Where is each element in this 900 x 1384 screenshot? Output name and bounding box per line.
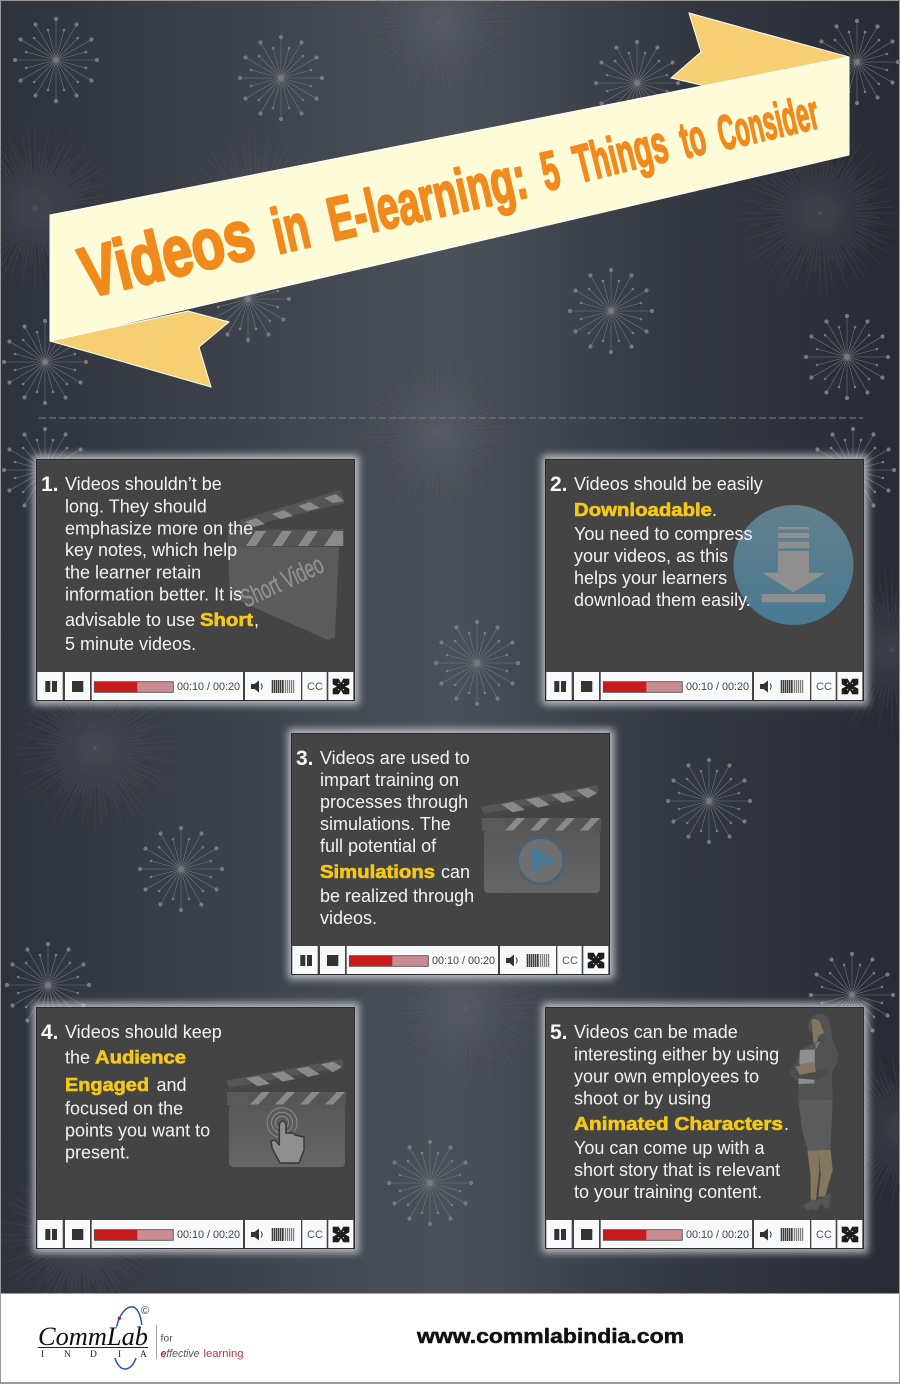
text block: . bbox=[784, 1114, 789, 1134]
text block: focused on the bbox=[65, 1098, 183, 1118]
text block: helps your learners bbox=[574, 568, 727, 588]
website url: www.commlabindia.com bbox=[416, 1326, 684, 1348]
logo: CommLab India: © bbox=[141, 1305, 149, 1317]
step number: 1. bbox=[41, 473, 59, 496]
step number: 3. bbox=[296, 747, 314, 770]
video control bar bbox=[292, 946, 608, 974]
text block: . bbox=[712, 500, 717, 520]
logo: CommLab India: I bbox=[118, 1350, 121, 1360]
text block: 5 minute videos. bbox=[65, 634, 196, 654]
video control bar: CC bbox=[816, 1229, 832, 1241]
text block: long. They should bbox=[65, 496, 207, 516]
panel 5: animated characters bbox=[542, 1003, 868, 1253]
step number: 2. bbox=[550, 473, 568, 496]
title: Videos bbox=[72, 195, 262, 313]
logo: CommLab India: N bbox=[64, 1350, 71, 1360]
text block: can bbox=[441, 862, 470, 882]
text block: Videos should be easily bbox=[574, 474, 763, 494]
text block: processes through bbox=[320, 792, 468, 812]
text block: short story that is relevant bbox=[574, 1160, 780, 1180]
title: to bbox=[674, 107, 712, 170]
video control bar: CC bbox=[816, 681, 832, 693]
ribbon banner bbox=[50, 13, 849, 387]
video control bar: CC bbox=[307, 681, 323, 693]
video control bar: 00:10 / 00:20 bbox=[432, 955, 495, 967]
text block: interesting either by using bbox=[574, 1044, 779, 1064]
text block bbox=[65, 1022, 222, 1162]
icon: short video clapperboard bbox=[228, 490, 345, 640]
video control bar: 00:10 / 00:20 bbox=[686, 681, 749, 693]
text block: advisable to use bbox=[65, 610, 195, 630]
title: 5 bbox=[535, 140, 565, 203]
text block: impart training on bbox=[320, 770, 459, 790]
logo: CommLab India: A bbox=[140, 1350, 147, 1360]
text block: Simulations bbox=[320, 862, 435, 882]
logo: CommLab India: D bbox=[90, 1350, 97, 1360]
logo: CommLab India: effective bbox=[160, 1348, 200, 1360]
logo: CommLab India: for bbox=[160, 1332, 173, 1344]
video control bar bbox=[546, 672, 862, 700]
text block: full potential of bbox=[320, 836, 437, 856]
title: Things bbox=[568, 114, 674, 195]
text block: download them easily. bbox=[574, 590, 751, 610]
video control bar bbox=[37, 672, 353, 700]
text block: Videos should keep bbox=[65, 1022, 222, 1042]
ribbon body bbox=[50, 57, 849, 341]
text block: present. bbox=[65, 1142, 130, 1162]
text block: to your training content. bbox=[574, 1182, 762, 1202]
icon: download bbox=[734, 505, 854, 625]
text block: videos. bbox=[320, 908, 377, 928]
text block: be realized through bbox=[320, 886, 474, 906]
text block: and bbox=[156, 1075, 187, 1095]
icon: short video clapperboard: Short Video bbox=[236, 549, 328, 613]
title: E-learning: bbox=[321, 143, 533, 254]
text block: shoot or by using bbox=[574, 1088, 711, 1108]
text block bbox=[65, 474, 259, 654]
video control bar bbox=[37, 1220, 353, 1248]
step number: 4. bbox=[41, 1021, 59, 1044]
text block: Videos are used to bbox=[320, 748, 470, 768]
text block: information better. It is bbox=[65, 584, 242, 604]
panel 3: simulations bbox=[288, 729, 614, 979]
text block: Videos can be made bbox=[574, 1022, 738, 1042]
text block: , bbox=[254, 610, 259, 630]
text block: the learner retain bbox=[65, 562, 201, 582]
footer bbox=[0, 1294, 900, 1384]
text block: the bbox=[65, 1048, 90, 1068]
text block bbox=[320, 748, 474, 928]
ribbon tail: right bbox=[671, 13, 849, 86]
text block: key notes, which help bbox=[65, 540, 237, 560]
divider bbox=[39, 417, 863, 419]
text block: Audience bbox=[95, 1048, 186, 1068]
text block: You can come up with a bbox=[574, 1138, 765, 1158]
text block: You need to compress bbox=[574, 524, 752, 544]
ribbon tail: left bbox=[50, 311, 229, 387]
icon: businesswoman figure bbox=[789, 1014, 838, 1211]
logo: CommLab India: learning bbox=[204, 1348, 244, 1360]
step number: 5. bbox=[550, 1021, 568, 1044]
video control bar: CC bbox=[307, 1229, 323, 1241]
text block bbox=[574, 1022, 789, 1202]
video control bar: 00:10 / 00:20 bbox=[177, 681, 240, 693]
logo: CommLab India: CommLab bbox=[38, 1322, 148, 1351]
title bbox=[72, 85, 824, 313]
panel 2: downloadable bbox=[542, 455, 868, 705]
video control bar: CC bbox=[562, 955, 578, 967]
icon: clapperboard with tapping hand bbox=[226, 1059, 346, 1167]
text block: points you want to bbox=[65, 1120, 210, 1140]
text block: Short bbox=[200, 610, 253, 630]
text block: your videos, as this bbox=[574, 546, 728, 566]
panel 1: short videos bbox=[33, 455, 359, 705]
icon: clapperboard with play button bbox=[481, 785, 601, 893]
video control bar: 00:10 / 00:20 bbox=[686, 1229, 749, 1241]
title: Consider bbox=[712, 85, 824, 162]
logo: CommLab India bbox=[38, 1305, 244, 1369]
title: in bbox=[265, 191, 316, 268]
video control bar bbox=[546, 1220, 862, 1248]
text block: Videos shouldn’t be bbox=[65, 474, 222, 494]
text block: Engaged bbox=[65, 1075, 149, 1095]
panel 4: audience engaged bbox=[33, 1003, 359, 1253]
logo: CommLab India: I bbox=[41, 1350, 44, 1360]
text block bbox=[574, 474, 763, 610]
text block: Animated Characters bbox=[574, 1114, 783, 1134]
video control bar: 00:10 / 00:20 bbox=[177, 1229, 240, 1241]
text block: your own employees to bbox=[574, 1066, 759, 1086]
text block: simulations. The bbox=[320, 814, 451, 834]
text block: emphasize more on the bbox=[65, 518, 253, 538]
text block: Downloadable bbox=[574, 500, 712, 520]
